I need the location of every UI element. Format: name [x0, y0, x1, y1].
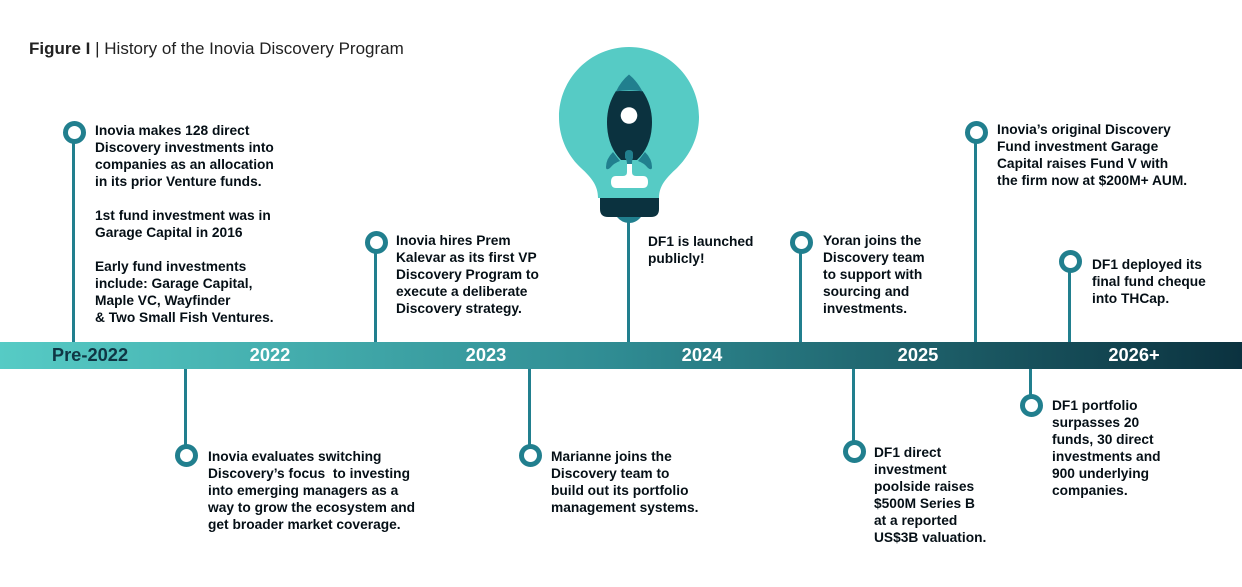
text block: Inovia evaluates switching — [208, 449, 381, 464]
text block: 1st fund investment was in — [95, 208, 271, 223]
text block: 900 underlying — [1052, 466, 1149, 481]
connector — [627, 222, 630, 342]
text block: surpasses 20 — [1052, 415, 1139, 430]
connector — [528, 369, 531, 449]
text block: poolside raises — [874, 479, 974, 494]
connector — [72, 130, 75, 342]
connector — [1068, 260, 1071, 342]
text block: Fund investment Garage — [997, 139, 1158, 154]
marker — [1020, 394, 1043, 417]
milestone: 2023 Prem Kalevar hire — [365, 231, 539, 342]
text block — [823, 233, 925, 316]
text block: investment — [874, 462, 947, 477]
text block: into emerging managers as a — [208, 483, 398, 498]
marker — [63, 121, 86, 144]
text block: Kalevar as its first VP — [396, 250, 537, 265]
text block: companies as an allocation — [95, 157, 274, 172]
marker — [175, 444, 198, 467]
text block — [1092, 257, 1206, 306]
text block: into THCap. — [1092, 291, 1169, 306]
text block — [648, 234, 753, 266]
text block: Early fund investments — [95, 259, 246, 274]
text block: $500M Series B — [874, 496, 975, 511]
text block: Discovery investments into — [95, 140, 274, 155]
text block — [997, 122, 1187, 188]
rocket nozzle — [625, 150, 633, 164]
marker — [843, 440, 866, 463]
milestone: 2024 Yoran joins — [790, 231, 925, 342]
connector — [1029, 369, 1032, 399]
text block — [95, 123, 274, 325]
text block — [1052, 398, 1161, 498]
text block: Discovery team to — [551, 466, 669, 481]
text block: Inovia makes 128 direct — [95, 123, 249, 138]
bulb base — [600, 198, 659, 217]
text block: investments and — [1052, 449, 1161, 464]
text block: way to grow the ecosystem and — [208, 500, 415, 515]
text block: Maple VC, Wayfinder — [95, 293, 230, 308]
marker — [519, 444, 542, 467]
text block: Capital raises Fund V with — [997, 156, 1168, 171]
year label: Pre-2022: Pre-2022 — [52, 344, 128, 365]
text block: funds, 30 direct — [1052, 432, 1154, 447]
text block: Discovery’s focus to investing — [208, 466, 410, 481]
text block — [551, 449, 698, 515]
text block: the firm now at $200M+ AUM. — [997, 173, 1187, 188]
milestone: 2025 Garage Capital Fund V — [965, 121, 1187, 342]
text block — [874, 445, 986, 545]
rocket window — [621, 107, 637, 124]
text block: companies. — [1052, 483, 1128, 498]
text block: DF1 portfolio — [1052, 398, 1138, 413]
connector — [374, 241, 377, 342]
text block: execute a deliberate — [396, 284, 527, 299]
text block: Discovery Program to — [396, 267, 539, 282]
bulb glass — [559, 47, 699, 198]
text block: in its prior Venture funds. — [95, 174, 262, 189]
marker — [965, 121, 988, 144]
marker — [1059, 250, 1082, 273]
text block: to support with — [823, 267, 922, 282]
text block: Inovia’s original Discovery — [997, 122, 1171, 137]
text block: Garage Capital in 2016 — [95, 225, 242, 240]
milestone: 2022 switching focus — [175, 369, 415, 532]
text block: & Two Small Fish Ventures. — [95, 310, 274, 325]
milestone: 2026 portfolio surpasses — [1020, 369, 1161, 498]
text block: publicly! — [648, 251, 705, 266]
text block: US$3B valuation. — [874, 530, 986, 545]
text block: get broader market coverage. — [208, 517, 401, 532]
text block: final fund cheque — [1092, 274, 1206, 289]
timeline bar — [0, 342, 1242, 369]
connector — [974, 131, 977, 342]
text block: Marianne joins the — [551, 449, 672, 464]
text block: Inovia hires Prem — [396, 233, 511, 248]
year label: 2026+: 2026+ — [1108, 344, 1160, 365]
text block: Discovery strategy. — [396, 301, 522, 316]
text block: at a reported — [874, 513, 957, 528]
milestone: 2026 final fund cheque — [1059, 250, 1206, 342]
marker — [790, 231, 813, 254]
milestone: 2025 poolside raise — [843, 369, 986, 545]
text block: DF1 direct — [874, 445, 941, 460]
text block — [396, 233, 539, 316]
marker — [365, 231, 388, 254]
title: Figure I | History of the Inovia Discovery Program — [29, 39, 404, 58]
icon: light bulb with rocket — [558, 47, 699, 223]
text block: Discovery team — [823, 250, 925, 265]
text block: investments. — [823, 301, 907, 316]
text block: sourcing and — [823, 284, 909, 299]
text block: DF1 is launched — [648, 234, 753, 249]
connector — [852, 369, 855, 445]
text block: build out its portfolio — [551, 483, 688, 498]
text block: Yoran joins the — [823, 233, 921, 248]
rocket body — [607, 91, 652, 160]
year label: 2023: 2023 — [466, 344, 506, 365]
connector — [184, 369, 187, 449]
text block: include: Garage Capital, — [95, 276, 252, 291]
rocket nose — [616, 74, 642, 92]
bulb tip — [617, 217, 641, 223]
milestone: 2023 Marianne joins — [519, 369, 698, 515]
text block — [208, 449, 415, 532]
text block: DF1 deployed its — [1092, 257, 1202, 272]
rocket fins — [606, 152, 652, 169]
year label: 2025: 2025 — [898, 344, 938, 365]
milestone: 2024 DF1 launched — [627, 222, 753, 342]
year label: 2022: 2022 — [250, 344, 290, 365]
text block: management systems. — [551, 500, 698, 515]
year label: 2024: 2024 — [682, 344, 722, 365]
rocket exhaust — [611, 156, 648, 188]
milestone: Pre-2022 Inovia direct investments — [63, 121, 274, 342]
connector — [799, 241, 802, 342]
